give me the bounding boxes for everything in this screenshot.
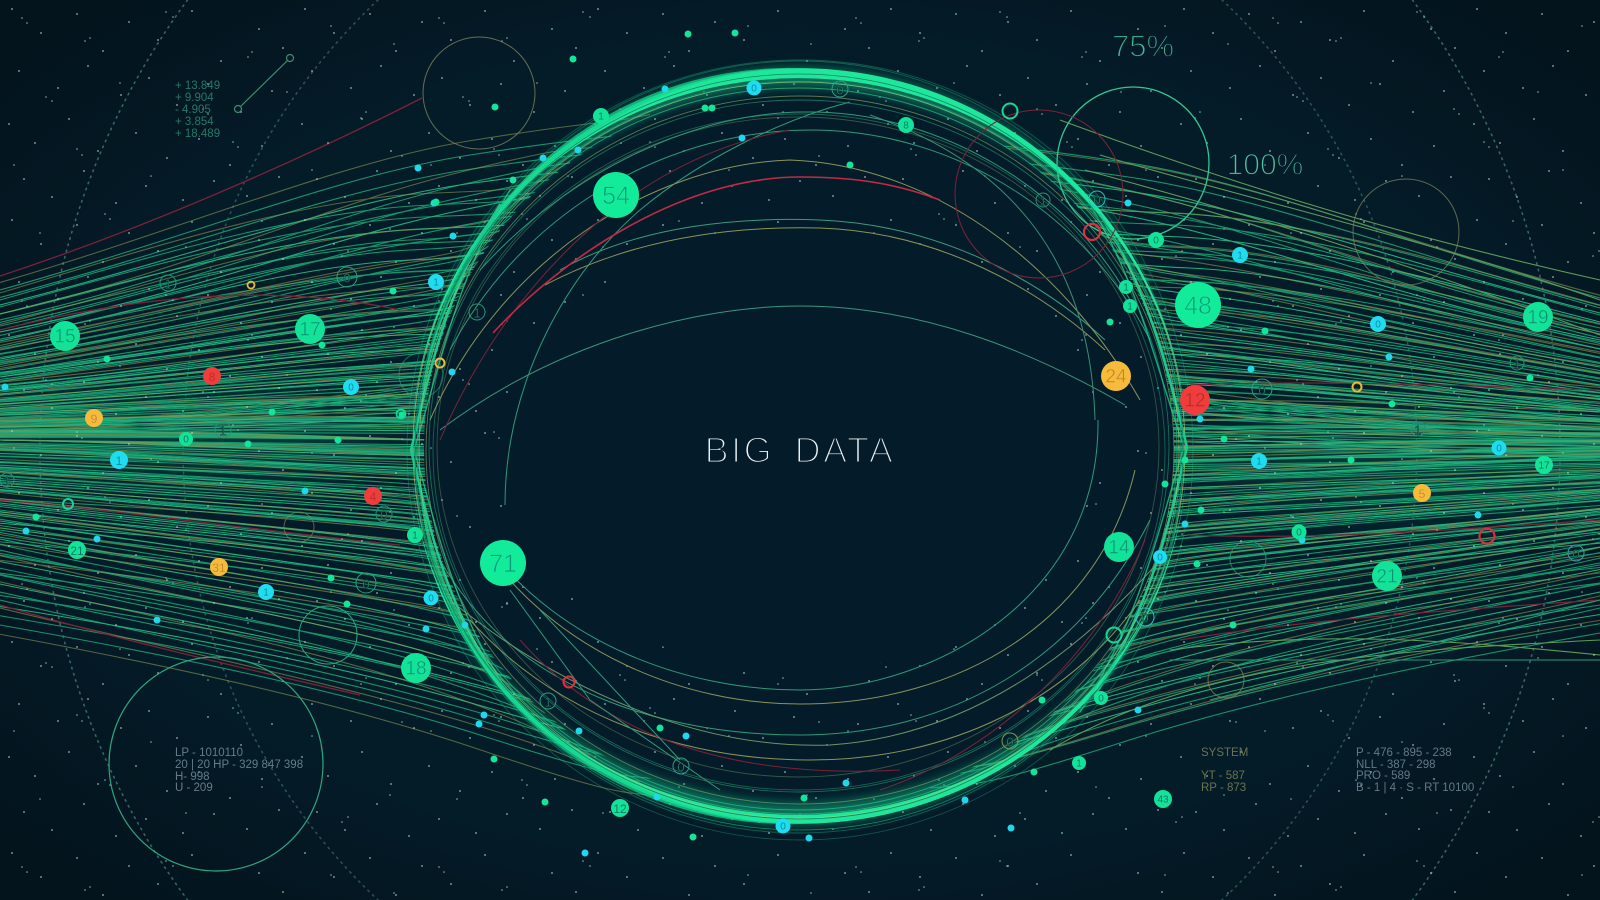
stats readout: top left: + 18.489 bbox=[175, 128, 220, 140]
node 15 bbox=[50, 321, 80, 351]
node 0 cyan bbox=[1492, 440, 1506, 456]
node 5 amber: 5 bbox=[1419, 487, 1426, 501]
stats readout: top left: + 13.849 bbox=[175, 80, 220, 92]
node 4 red: 4 bbox=[370, 490, 377, 504]
line bundle: left stream bbox=[0, 98, 670, 797]
node 19: 19 bbox=[1527, 308, 1549, 328]
node 43: 43 bbox=[1157, 794, 1169, 806]
ring texture lines bbox=[415, 74, 1183, 830]
node 0 cyan bbox=[776, 818, 790, 834]
node 17 right bbox=[1535, 456, 1553, 474]
outlined digit nodes: 0 bbox=[343, 270, 351, 286]
readout: bottom right bbox=[1356, 747, 1474, 794]
node 15: 15 bbox=[54, 326, 76, 348]
stats readout: top left: + 3.854 bbox=[175, 116, 214, 128]
outlined digit nodes: 0 bbox=[380, 508, 388, 522]
outlined digit nodes: 1 bbox=[219, 424, 227, 438]
node 0 green: 0 bbox=[1153, 236, 1159, 246]
readout: system: YT - 587 bbox=[1201, 770, 1245, 782]
node 0 cyan bbox=[746, 80, 762, 96]
node 1 green: 1 bbox=[412, 530, 418, 542]
node 17 bbox=[295, 314, 325, 344]
node 24 amber bbox=[1101, 361, 1131, 391]
node 31 amber: 31 bbox=[212, 561, 226, 575]
node 0 green bbox=[1148, 232, 1164, 248]
node 0 cyan bbox=[1370, 316, 1386, 332]
outlined digit nodes: 1 bbox=[1414, 422, 1422, 438]
glow behind left and right bands bbox=[0, 392, 1600, 505]
node 0 green bbox=[1094, 691, 1108, 705]
node 8 red: 8 bbox=[209, 370, 216, 384]
connector icon bbox=[234, 54, 294, 112]
node 1 cyan: 1 bbox=[1256, 456, 1262, 468]
node 48: 48 bbox=[1184, 292, 1212, 320]
readout: bottom left: H- 998 bbox=[175, 771, 210, 783]
outlined digit nodes: 1 bbox=[473, 306, 481, 320]
node 0 cyan: 0 bbox=[348, 382, 354, 394]
red arc bbox=[493, 177, 940, 333]
node 1 cyan: 1 bbox=[116, 454, 123, 468]
node 0 green: 0 bbox=[1296, 528, 1302, 538]
node 24 amber: 24 bbox=[1105, 366, 1127, 388]
node 1 cyan: 1 bbox=[263, 588, 269, 598]
node 43 bbox=[1154, 790, 1172, 808]
clear eye of the ring bbox=[505, 228, 1095, 672]
outlined digit nodes: 0 bbox=[1006, 734, 1014, 750]
node 0 green bbox=[179, 432, 193, 446]
node 4 red bbox=[364, 487, 382, 505]
ring side wedges bbox=[411, 190, 1187, 712]
node 21 small: 21 bbox=[70, 544, 84, 558]
node 1 green bbox=[1123, 299, 1137, 313]
node 54 bbox=[593, 172, 639, 218]
readout: bottom left bbox=[175, 747, 303, 794]
node 9 amber bbox=[85, 409, 103, 427]
node 1 green: 1 bbox=[598, 112, 604, 122]
node 1 green bbox=[407, 527, 423, 543]
node 0 cyan: 0 bbox=[1375, 320, 1381, 330]
node 1 green: 1 bbox=[1127, 302, 1133, 312]
node 0 cyan: 0 bbox=[1496, 444, 1502, 454]
stats readout: top left: + 9.904 bbox=[175, 92, 214, 104]
node 12 small bbox=[611, 799, 629, 817]
node 71: 71 bbox=[489, 550, 517, 578]
node 21: 21 bbox=[1376, 566, 1398, 588]
node 1 green bbox=[593, 108, 609, 124]
node 0 cyan bbox=[343, 379, 359, 395]
node 12 red: 12 bbox=[1184, 390, 1206, 412]
node 71 bbox=[480, 540, 526, 586]
node 0 cyan bbox=[1153, 550, 1167, 564]
outlined digit nodes: 0 bbox=[836, 82, 844, 98]
node 0 green bbox=[1292, 524, 1306, 540]
outlined digit nodes: 1 bbox=[1039, 194, 1047, 208]
readout: bottom right: PRO - 589 bbox=[1356, 770, 1410, 782]
outlined digit nodes: 0 bbox=[677, 760, 685, 774]
node 1 green: 1 bbox=[1123, 282, 1129, 294]
inner arcs bbox=[430, 102, 1160, 790]
readout: system bbox=[1201, 747, 1248, 794]
bright data ring bbox=[411, 68, 1187, 824]
node 21 small bbox=[68, 541, 86, 559]
node 1 green bbox=[1119, 280, 1133, 294]
label: 75%: 75% bbox=[1112, 28, 1174, 64]
node 8 green bbox=[898, 117, 914, 133]
readout: system: SYSTEM bbox=[1201, 747, 1248, 759]
ring glow bbox=[411, 68, 1187, 824]
node 0 cyan bbox=[424, 590, 438, 606]
node 1 cyan bbox=[258, 584, 274, 600]
readout: bottom right: NLL - 387 - 298 bbox=[1356, 759, 1435, 771]
thin ring orbits bbox=[407, 60, 1193, 840]
node 1 cyan bbox=[1251, 453, 1267, 469]
title: BIG DATA: BIG DATA bbox=[705, 430, 895, 470]
outlined digit nodes: 1 bbox=[544, 694, 552, 710]
outlined digit nodes: 1 bbox=[1513, 356, 1521, 372]
outlined digit nodes: 1 bbox=[164, 276, 172, 292]
readout: system: RP - 873 bbox=[1201, 782, 1246, 794]
node 0 cyan: 0 bbox=[751, 84, 757, 94]
outlined digit nodes: 0 bbox=[1258, 382, 1266, 398]
node 1 cyan: 1 bbox=[433, 278, 439, 288]
node 8 red bbox=[203, 367, 221, 385]
dotted orbit: inner bbox=[183, 0, 1417, 900]
node 48 bbox=[1175, 282, 1221, 328]
node 12 small: 12 bbox=[613, 802, 627, 816]
readout: bottom left: 20 | 20 HP - 329 847 398 bbox=[175, 759, 303, 771]
node 21 bbox=[1372, 561, 1402, 591]
readout: bottom right: P - 476 - 895 - 238 bbox=[1356, 747, 1452, 759]
node 31 amber bbox=[210, 558, 228, 576]
node 1 cyan bbox=[1232, 247, 1248, 263]
node 1 cyan bbox=[110, 451, 128, 469]
node 0 green: 0 bbox=[183, 434, 189, 446]
node 14 bbox=[1104, 532, 1134, 562]
node 12 red bbox=[1180, 385, 1210, 415]
line bundle: right stream bbox=[930, 120, 1600, 788]
node 0 cyan: 0 bbox=[1157, 552, 1163, 564]
ring markers bbox=[63, 104, 1494, 688]
outlined digit nodes: 0 bbox=[1572, 546, 1580, 562]
node 54: 54 bbox=[602, 182, 630, 210]
ring interior backdrop bbox=[424, 88, 1174, 808]
node 1 cyan: 1 bbox=[1237, 250, 1243, 262]
readout: bottom left: LP - 1010110 bbox=[175, 747, 243, 759]
thin outline circles bbox=[109, 37, 1459, 871]
outlined digit nodes bbox=[0, 81, 1584, 774]
stats readout: top left: - 4.905 bbox=[175, 104, 211, 116]
node 18 bbox=[401, 653, 431, 683]
outlined digit nodes: 0 bbox=[1093, 192, 1101, 208]
outlined digit nodes: 0 bbox=[1141, 610, 1149, 626]
node 1 green bbox=[1072, 756, 1086, 770]
node 5 amber bbox=[1413, 484, 1431, 502]
node 17 right: 17 bbox=[1538, 460, 1550, 472]
node 8 green: 8 bbox=[903, 120, 909, 132]
node 9 amber: 9 bbox=[91, 412, 98, 426]
readout: bottom left: U - 209 bbox=[175, 782, 213, 794]
node 1 green: 1 bbox=[1076, 758, 1082, 770]
readout: bottom right: B - 1 | 4 · S - RT 10100 bbox=[1356, 782, 1474, 794]
node 14: 14 bbox=[1108, 538, 1130, 558]
node 1 cyan bbox=[428, 274, 444, 290]
node 19 bbox=[1523, 302, 1553, 332]
stats readout: top left bbox=[175, 80, 220, 140]
node 0 cyan: 0 bbox=[428, 594, 434, 604]
label: 100%: 100% bbox=[1227, 148, 1303, 182]
node 0 green: 0 bbox=[1098, 694, 1104, 704]
outlined digit nodes: 0 bbox=[362, 576, 370, 592]
node 0 cyan: 0 bbox=[780, 822, 786, 832]
outlined digit nodes: 1 bbox=[3, 474, 11, 488]
node 18: 18 bbox=[405, 658, 427, 680]
node 17: 17 bbox=[299, 320, 321, 340]
